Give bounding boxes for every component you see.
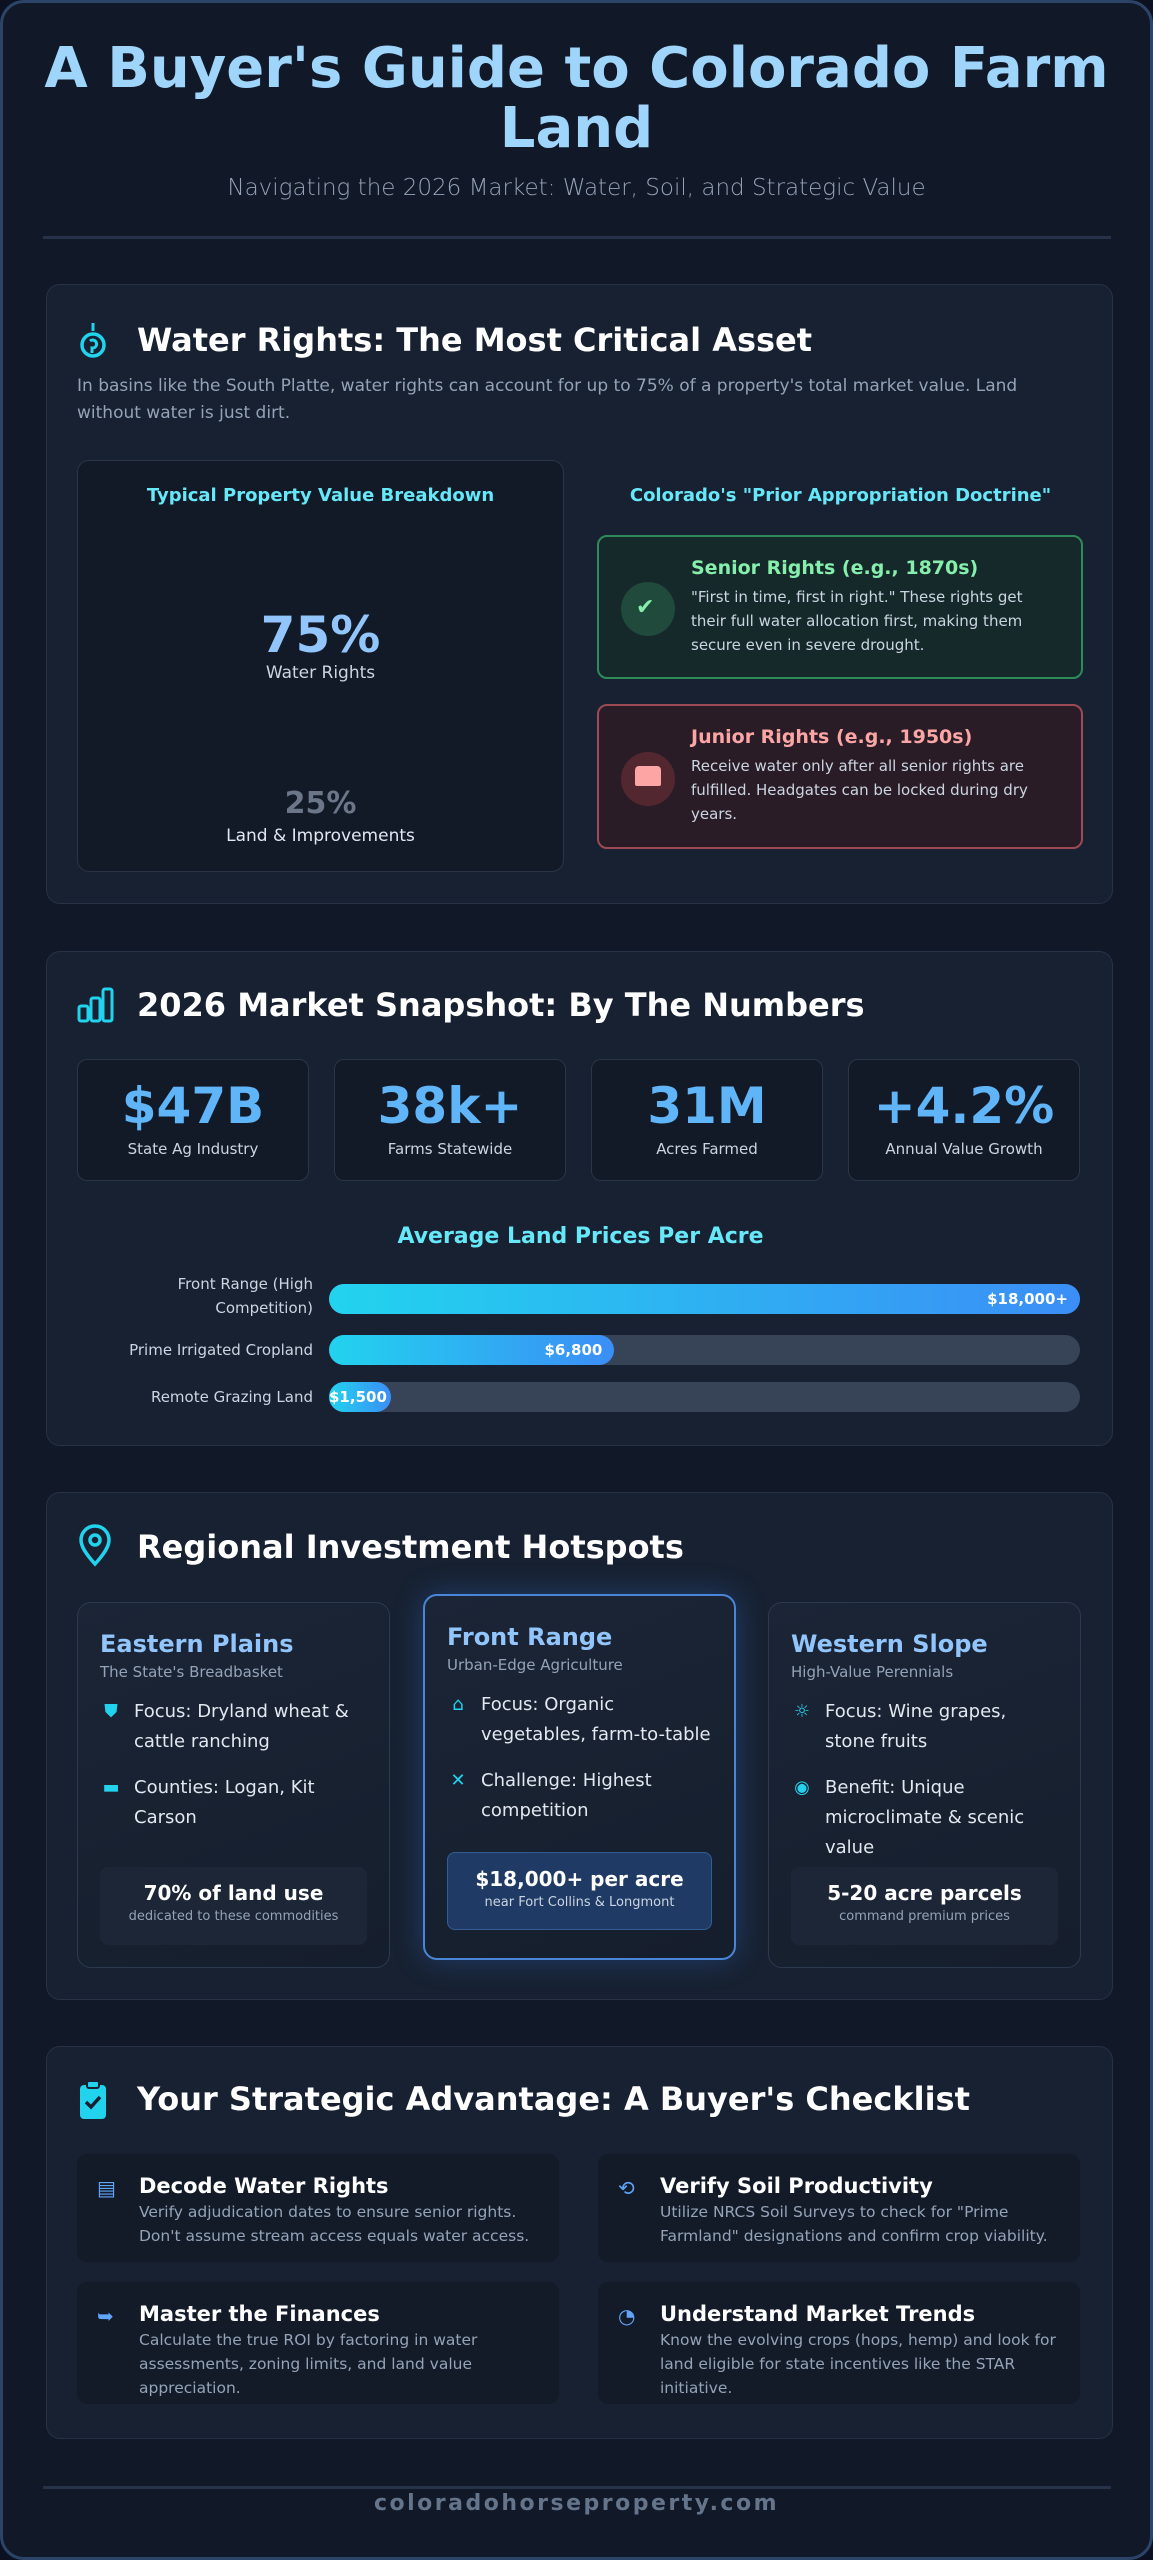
chart: property value breakdown: Typical Property Value Breakdown — [147, 485, 494, 506]
card: junior rights: Receive water only after all senior rights are fulfilled. Headgates can be locked during dry years. — [691, 757, 1028, 823]
icon: clipboard — [80, 2082, 106, 2119]
item: decode water rights: Verify adjudication dates to ensure senior rights. Don't assume stream access equals water access. — [139, 2203, 529, 2245]
doctrine title: Colorado's "Prior Appropriation Doctrine" — [630, 485, 1051, 506]
icon: bar chart — [78, 988, 114, 1022]
card: front range: ✕ — [450, 1770, 466, 1791]
card: western slope: ☼ — [794, 1701, 810, 1722]
item: verify soil — [598, 2154, 1080, 2262]
card: senior rights — [597, 535, 1083, 679]
card: front range: Focus: Organic vegetables, farm-to-table — [481, 1694, 711, 1745]
card: eastern plains: The State's Breadbasket — [100, 1663, 283, 1681]
card: eastern plains: Focus: Dryland wheat & cattle ranching — [134, 1701, 349, 1752]
card: senior rights: Senior Rights (e.g., 1870s) — [691, 557, 978, 579]
card: eastern plains: Eastern Plains — [100, 1630, 294, 1658]
card: eastern plains — [77, 1602, 390, 1968]
card: eastern plains: dedicated to these commodities — [129, 1909, 338, 1924]
stat: acres: 31M — [647, 1077, 767, 1135]
heading: Your Strategic Advantage: A Buyer's Checklist — [137, 2080, 970, 2118]
icon: map pin — [79, 1524, 111, 1566]
card: senior rights: ✔ — [636, 595, 654, 620]
title: A Buyer's Guide to Colorado Farm — [44, 36, 1109, 101]
footer: coloradohorseproperty.com — [374, 2491, 779, 2516]
bar chart: Competition) — [215, 1299, 313, 1317]
panel: market snapshot: $1,500 — [329, 1388, 387, 1406]
item: market trends — [598, 2282, 1080, 2404]
item: market trends: ◔ — [618, 2304, 635, 2328]
card: eastern plains: ▬ — [102, 1777, 120, 1798]
card: western slope: High-Value Perennials — [791, 1663, 953, 1681]
icon: water drop — [80, 323, 106, 358]
item: verify soil: Utilize NRCS Soil Surveys to check for "Prime Farmland" designations and confirm crop viability. — [660, 2203, 1048, 2245]
stat: ag industry: $47B — [122, 1077, 264, 1135]
bar chart: Prime Irrigated Cropland — [129, 1341, 313, 1359]
subtitle: Navigating the 2026 Market: Water, Soil, and Strategic Value — [227, 175, 926, 201]
item: finances: Master the Finances — [139, 2302, 380, 2326]
card: western slope: command premium prices — [839, 1909, 1010, 1924]
card: western slope: Benefit: Unique microclimate & scenic value — [825, 1777, 1024, 1858]
heading: 2026 Market Snapshot: By The Numbers — [137, 986, 865, 1024]
item: verify soil: Verify Soil Productivity — [660, 2174, 933, 2198]
stat: farms — [334, 1059, 566, 1181]
bar chart: $6,800 — [544, 1341, 602, 1359]
card: junior rights — [597, 704, 1083, 849]
bar chart: $18,000+ — [987, 1290, 1068, 1308]
stat: ag industry — [77, 1059, 309, 1181]
item: finances: Calculate the true ROI by factoring in water assessments, zoning limits, and land value appreciation. — [139, 2331, 477, 2397]
item: market trends: Know the evolving crops (hops, hemp) and look for land eligible for state incentives like the STAR initiative. — [660, 2331, 1056, 2397]
chart: property value breakdown: 75% — [261, 606, 380, 664]
item: finances — [77, 2282, 559, 2404]
card: senior rights: "First in time, first in right." These rights get their full water allocation first, making them secure even in severe drought. — [691, 588, 1022, 654]
chart: property value breakdown: Land & Improvements — [226, 826, 415, 846]
chart title: Average Land Prices Per Acre — [397, 1224, 764, 1249]
bar chart — [129, 1275, 1080, 1412]
stat: growth: +4.2% — [874, 1077, 1054, 1135]
chart: property value breakdown: 25% — [285, 786, 356, 821]
stat: acres: Acres Farmed — [656, 1140, 758, 1158]
stat: acres — [591, 1059, 823, 1181]
chart: property value breakdown — [77, 460, 564, 872]
item: finances: ➥ — [97, 2304, 114, 2328]
item: market trends: Understand Market Trends — [660, 2302, 975, 2326]
stat: farms: Farms Statewide — [388, 1140, 512, 1158]
card: front range — [423, 1594, 736, 1960]
card: western slope: 5-20 acre parcels — [827, 1881, 1022, 1905]
panel: regional hotspots — [46, 1492, 1113, 2000]
stat: growth: Annual Value Growth — [885, 1140, 1043, 1158]
item: decode water rights: Decode Water Rights — [139, 2174, 389, 2198]
card: eastern plains: 70% of land use — [144, 1881, 323, 1905]
item: decode water rights — [77, 2154, 559, 2262]
card: eastern plains: Counties: Logan, Kit Carson — [134, 1777, 315, 1828]
panel: market snapshot: Remote Grazing Land — [151, 1388, 313, 1406]
heading: Water Rights: The Most Critical Asset — [137, 321, 812, 359]
stat: growth — [848, 1059, 1080, 1181]
card: front range: $18,000+ per acre — [475, 1867, 684, 1891]
card: front range: Challenge: Highest competition — [481, 1770, 652, 1821]
panel: water rights — [46, 284, 1113, 904]
card: western slope — [768, 1602, 1081, 1968]
title: Land — [500, 96, 653, 161]
panel: market snapshot — [46, 951, 1113, 1446]
title — [44, 36, 1109, 161]
panel: checklist — [46, 2046, 1113, 2439]
card: front range: ⌂ — [452, 1694, 464, 1715]
chart: property value breakdown: Water Rights — [266, 663, 375, 683]
card: junior rights: Junior Rights (e.g., 1950s) — [691, 726, 972, 748]
bar chart: Front Range (High — [178, 1275, 313, 1293]
card: western slope: Focus: Wine grapes, stone fruits — [825, 1701, 1006, 1752]
card: front range: Urban-Edge Agriculture — [447, 1656, 623, 1674]
item: decode water rights: ▤ — [97, 2176, 116, 2200]
heading: Regional Investment Hotspots — [137, 1528, 684, 1566]
card: front range: near Fort Collins & Longmont — [485, 1895, 674, 1910]
intro text: In basins like the South Platte, water rights can account for up to 75% of a property's total market value. Land without water is just dirt. — [77, 376, 1017, 423]
card: front range: Front Range — [447, 1623, 612, 1651]
card: western slope: ◉ — [794, 1777, 810, 1798]
stat: ag industry: State Ag Industry — [128, 1140, 258, 1158]
stat: farms: 38k+ — [378, 1077, 522, 1135]
item: verify soil: ⟲ — [618, 2176, 635, 2200]
card: eastern plains: ⛊ — [104, 1701, 118, 1722]
card: western slope: Western Slope — [791, 1630, 988, 1658]
